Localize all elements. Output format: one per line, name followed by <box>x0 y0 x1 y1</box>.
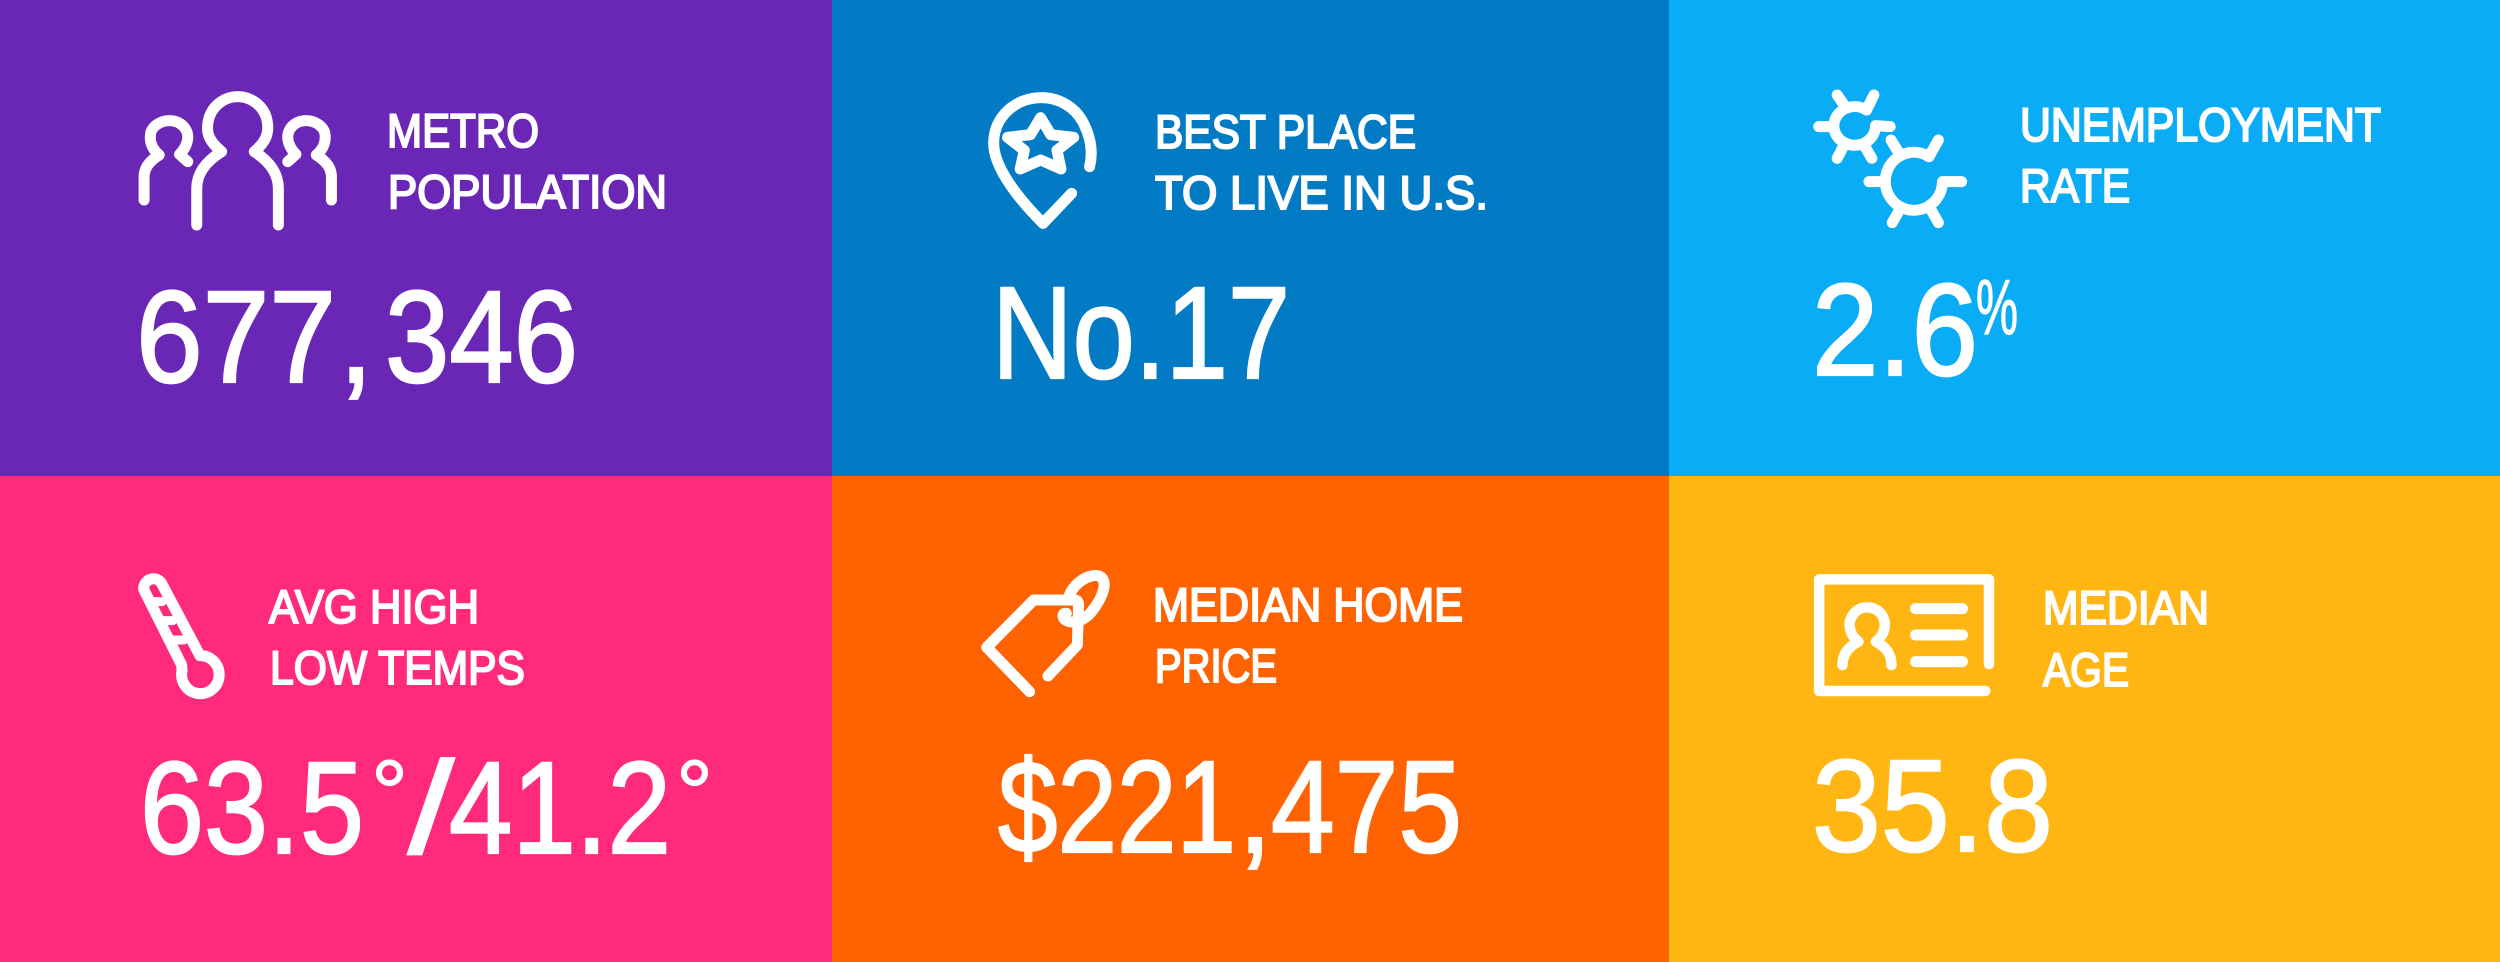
panel: metro population <box>0 0 832 476</box>
heading: median home price: PRICE <box>1155 639 1277 692</box>
heading: avg high low temps <box>269 580 525 694</box>
value: 677,346: 677 <box>136 263 336 410</box>
heading: metro population <box>387 104 667 218</box>
heading: median age <box>2043 581 2209 696</box>
icon: gears <box>1819 95 1962 223</box>
heading: unemployment rate: RATE <box>2020 159 2130 212</box>
heading: metro population: METRO <box>387 104 539 157</box>
heading: median age: AGE <box>2043 643 2129 696</box>
panel: median age <box>1669 476 2500 962</box>
icon: thermometer <box>144 579 219 694</box>
heading: best place to live in U.S. <box>1155 105 1488 219</box>
heading: median home price: MEDIAN HOME <box>1153 578 1463 631</box>
value: $221,475: $221 <box>998 733 1236 880</box>
value: $221,475 <box>998 733 1462 880</box>
value: No.17: No.17 <box>992 259 1290 406</box>
value: 63.5°/41.2°: 63.5 <box>140 734 364 881</box>
panel: median home price <box>832 476 1669 962</box>
value: 677,346 <box>136 263 578 410</box>
value: 63.5°/41.2°: ° <box>371 742 408 844</box>
heading: median home price <box>1153 578 1463 692</box>
icon: map pin with star <box>994 98 1091 223</box>
icon: ID card <box>1819 579 1989 691</box>
value: 63.5°/41.2°: ° <box>676 742 713 844</box>
heading: best place to live in U.S.: TO LIVE IN U.S. <box>1155 166 1488 219</box>
panel: unemployment rate <box>1669 0 2500 476</box>
value: 677,346: , <box>339 263 373 410</box>
value: $221,475: , <box>1238 733 1272 880</box>
value: 63.5°/41.2° <box>140 734 713 881</box>
icon: group of people <box>144 97 331 225</box>
value: $221,475: 475 <box>1271 733 1462 880</box>
value: 63.5°/41.2°: 41.2 <box>449 734 671 881</box>
heading: unemployment rate <box>2020 98 2381 212</box>
value: 63.5°/41.2°: / <box>408 734 455 881</box>
heading: median age: MEDIAN <box>2043 581 2209 634</box>
value: 35.8: 35.8 <box>1812 732 2053 879</box>
icon: price tag <box>987 576 1104 692</box>
panel: average high and low temperatures <box>0 476 832 962</box>
value: 2.6%: 2.6 <box>1812 256 1978 403</box>
value: 2.6%: % <box>1976 263 2018 351</box>
heading: best place to live in U.S.: BEST PLACE <box>1155 105 1416 158</box>
heading: unemployment rate: UNEMPLOYMENT <box>2020 98 2381 151</box>
heading: avg high low temps: AVG HIGH <box>269 580 479 633</box>
heading: metro population: POPULATION <box>388 165 667 218</box>
panel: best place to live <box>832 0 1669 476</box>
value: 677,346: 346 <box>385 263 578 410</box>
heading: avg high low temps: LOW TEMPS <box>270 641 525 694</box>
